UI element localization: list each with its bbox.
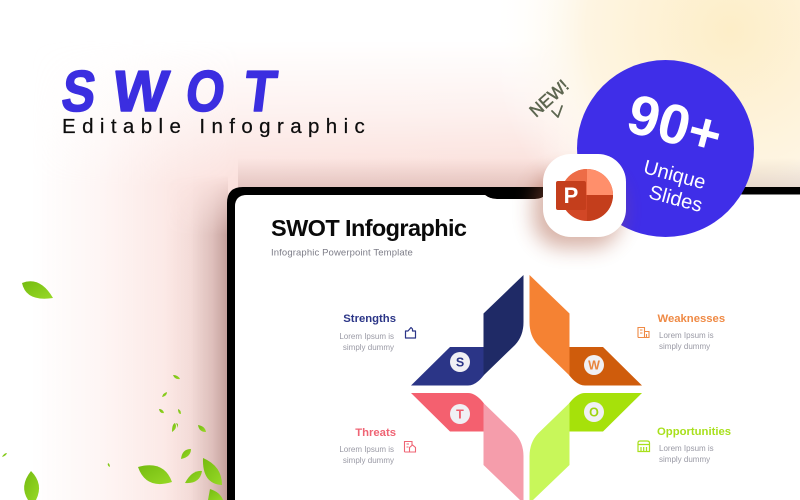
icon: weaknesses <box>638 328 649 338</box>
slide heading: SWOT Infographic: SWOT Infographic <box>271 215 467 241</box>
text block: weaknesses: simply dummy <box>659 342 710 351</box>
segment: strengths <box>411 275 524 386</box>
text block: weaknesses <box>658 313 725 351</box>
text block: strengths: Strengths <box>343 313 396 325</box>
title: SWOT: S <box>58 59 100 124</box>
text block: opportunities: simply dummy <box>659 455 710 464</box>
icon: opportunities <box>638 441 650 452</box>
title: SWOT <box>58 59 280 124</box>
text block: strengths <box>339 313 396 352</box>
text block: threats: simply dummy <box>343 456 394 465</box>
text block: threats: Threats <box>355 427 396 439</box>
segment: opportunities <box>530 393 642 500</box>
text block: opportunities: Lorem Ipsum is <box>659 444 714 453</box>
badge number: 90+ <box>621 81 729 167</box>
text block: strengths: Lorem Ipsum is <box>339 332 394 341</box>
leaves <box>2 281 223 500</box>
badge: O: O <box>589 406 599 420</box>
slide subheading: Infographic Powerpoint Template <box>271 248 413 258</box>
title: SWOT: W <box>109 59 172 124</box>
icon: PowerPoint <box>533 154 626 248</box>
title: SWOT: T <box>240 59 280 124</box>
title: SWOT: O <box>182 60 229 124</box>
text block: opportunities: Opportunities <box>657 426 731 438</box>
label: new: NEW! <box>525 76 573 121</box>
text block: threats: Lorem Ipsum is <box>339 445 394 454</box>
segment: weaknesses <box>530 275 642 386</box>
badge: S: S <box>456 356 464 370</box>
text block: opportunities <box>657 426 731 464</box>
badge: 90+ unique slides <box>577 60 754 237</box>
text block: weaknesses: Weaknesses <box>658 313 725 325</box>
badge caption: Slides <box>646 182 705 217</box>
subtitle: Editable Infographic: Editable Infographic <box>62 115 371 138</box>
badge: T: T <box>456 408 464 422</box>
badge: W: W <box>588 358 600 372</box>
icon: strengths <box>406 328 416 338</box>
icon: PowerPoint: P <box>564 183 578 208</box>
text block: threats <box>339 427 396 465</box>
text block: weaknesses: Lorem Ipsum is <box>659 331 714 340</box>
icon: threats <box>404 442 416 452</box>
badge caption <box>641 156 708 217</box>
segment: threats <box>411 393 524 500</box>
badge caption: Unique <box>641 156 708 194</box>
text block: strengths: simply dummy <box>343 343 394 352</box>
laptop frame <box>227 187 800 500</box>
